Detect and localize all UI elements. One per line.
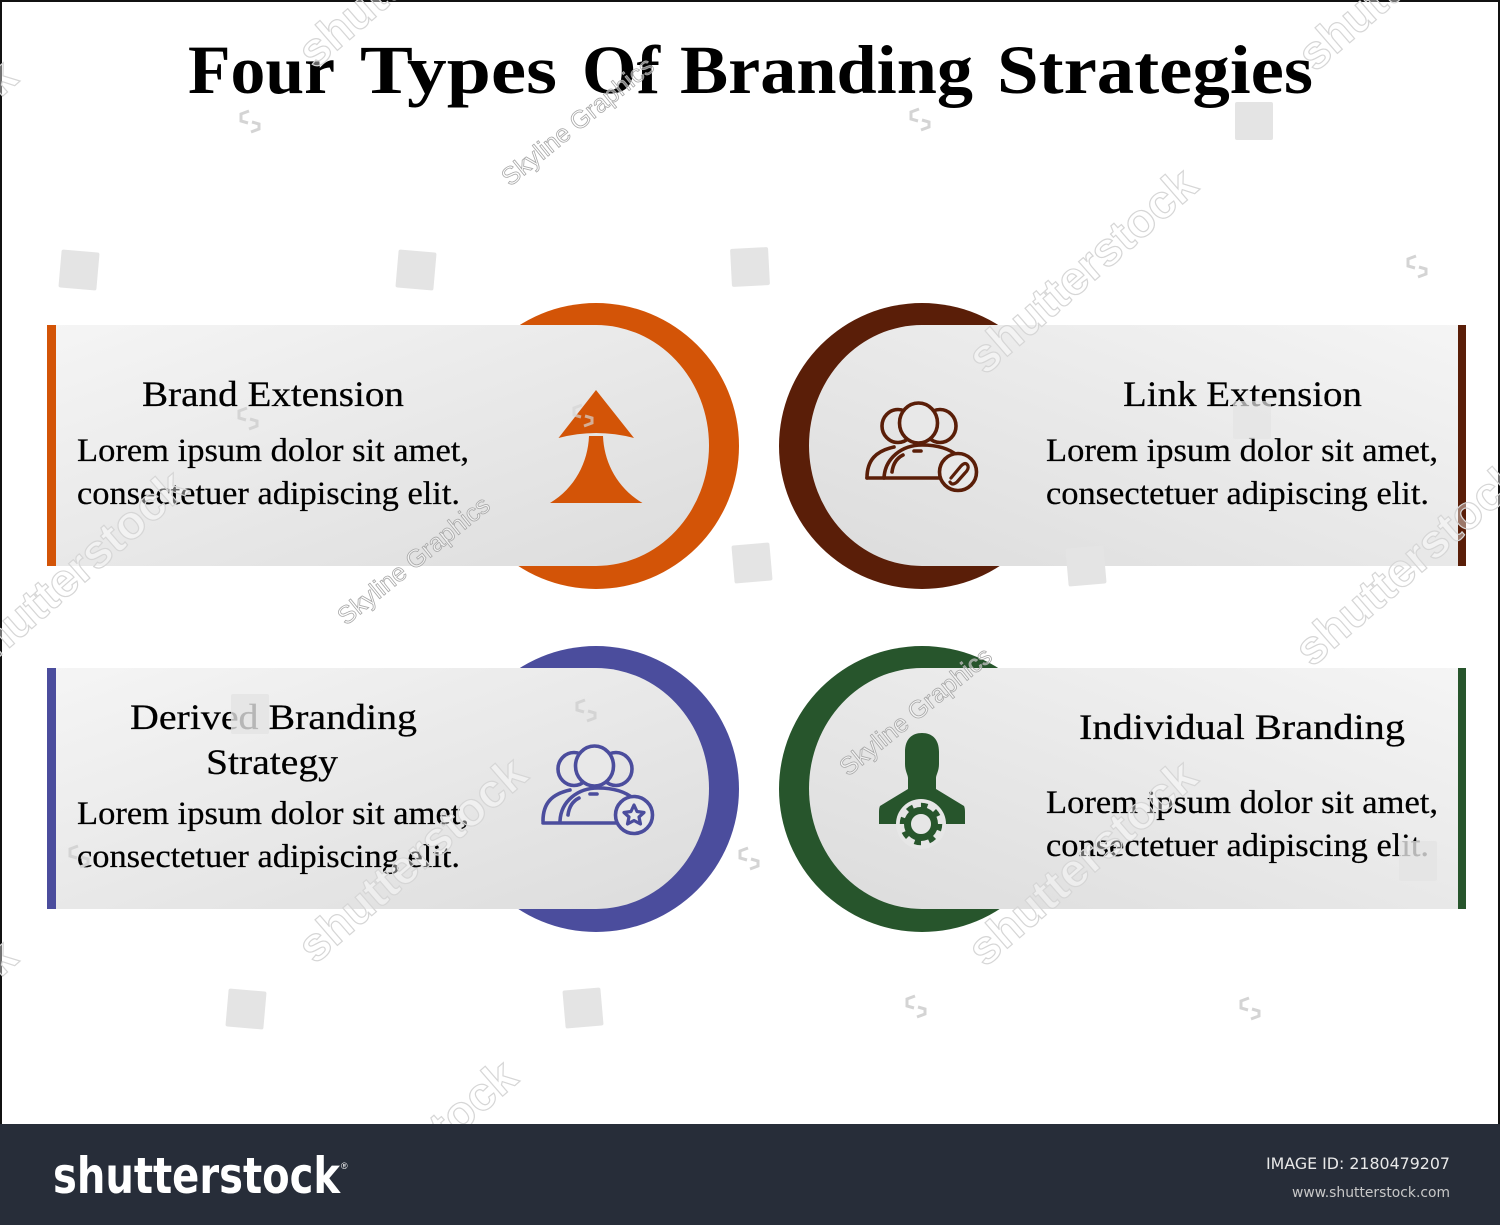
panel: Link Extension [779,303,1466,589]
panel: Derived Branding Strategy [47,646,739,932]
ring: Individual Branding [779,646,1065,932]
ring: Derived Branding Strategy [453,646,739,932]
card: Brand Extension [47,325,709,566]
footer bar [0,1124,1500,1225]
title [188,32,1313,108]
panel: Individual Branding [779,646,1466,932]
body: Derived Branding Strategy: consectetuer adipiscing elit. [77,839,460,875]
watermarks: shutterstock [957,748,1207,976]
card: Link Extension [809,325,1466,566]
accent bar: Individual Branding [1458,668,1466,909]
accent bar: Derived Branding Strategy [47,668,56,909]
title: Four [188,32,335,108]
heading: Derived Branding Strategy: Derived Branding [130,697,417,737]
title: Strategies [997,32,1313,108]
icon: people with paperclip badge [867,403,976,490]
heading: Link Extension: Link Extension [1123,374,1362,414]
ring: Link Extension [779,303,1065,589]
watermarks: Skyline Graphics [332,491,496,631]
website: www.shutterstock.com [1292,1185,1450,1201]
watermarks: shutterstock [957,156,1207,384]
body: Individual Branding: consectetuer adipiscing elit. [1046,828,1429,864]
footer logo: shutterstock [53,1147,341,1205]
watermarks: shutterstock [287,745,537,973]
card: Individual Branding [809,668,1466,909]
body: Link Extension: Lorem ipsum dolor sit amet, [1046,433,1438,469]
watermarks: Skyline Graphics [496,52,660,192]
body: Derived Branding Strategy: Lorem ipsum dolor sit amet, [77,796,469,832]
title: Types [360,32,557,108]
card: Derived Branding Strategy [47,668,709,909]
accent bar: Link Extension [1458,325,1466,566]
heading: Derived Branding Strategy: Strategy [206,742,338,782]
ring: Brand Extension [453,303,739,589]
image id: IMAGE ID: 2180479207 [1266,1154,1450,1173]
icon: person with gear [879,733,965,849]
icon: up arrow [550,390,642,503]
registered mark: ® [341,1161,348,1171]
accent bar: Brand Extension [47,325,56,566]
body: Link Extension: consectetuer adipiscing elit. [1046,476,1429,512]
title: Of [582,32,661,108]
icon: people with star badge [543,746,652,834]
heading: Individual Branding: Individual Branding [1079,707,1405,747]
body: Brand Extension: consectetuer adipiscing elit. [77,476,460,512]
heading: Brand Extension: Brand Extension [142,374,404,414]
watermarks: Skyline Graphics [834,642,998,782]
panel: Brand Extension [47,303,739,589]
body: Individual Branding: Lorem ipsum dolor sit amet, [1046,785,1438,821]
body: Brand Extension: Lorem ipsum dolor sit amet, [77,433,469,469]
title: Branding [680,32,973,108]
